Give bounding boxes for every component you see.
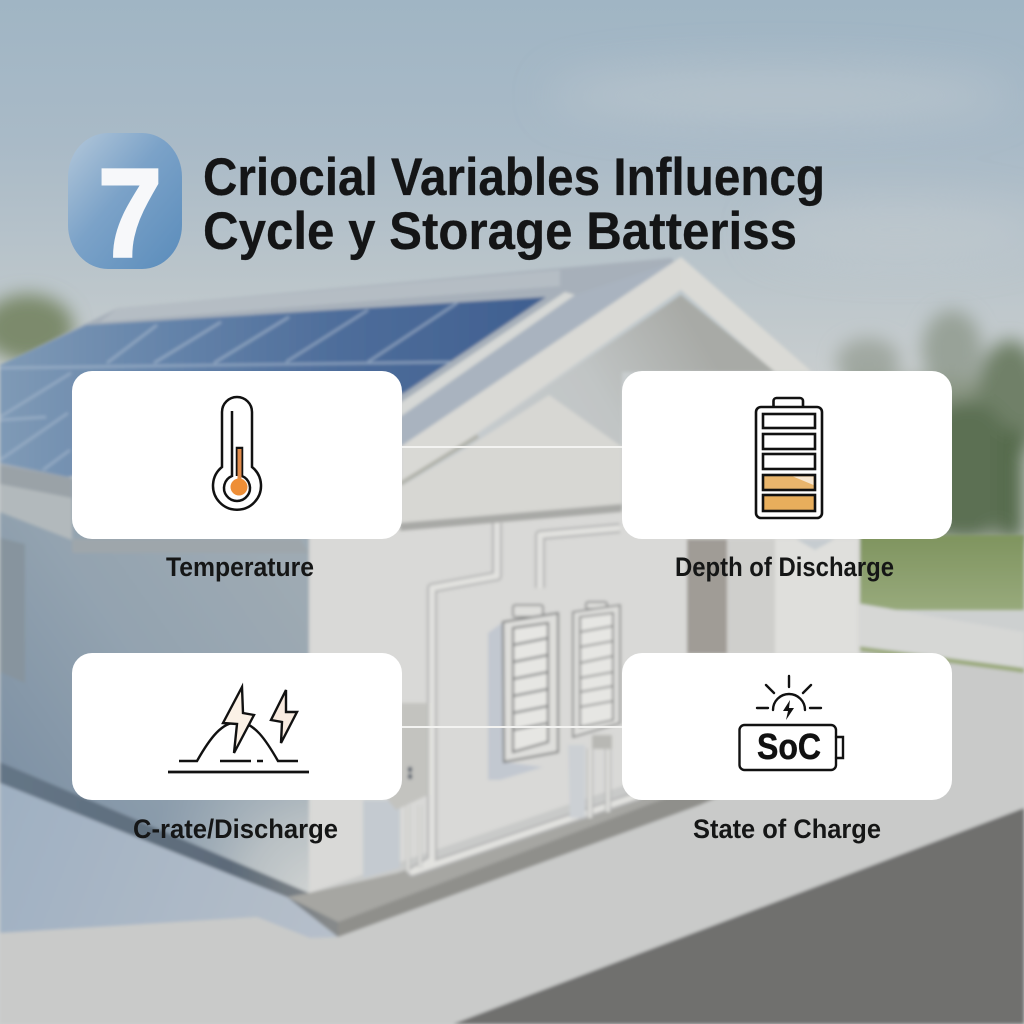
connector line: bottom row	[402, 726, 622, 728]
number badge: 7	[98, 144, 162, 283]
roof	[0, 258, 675, 478]
title: Cycle y Storage Batteriss	[203, 202, 797, 261]
gable	[400, 295, 775, 487]
icon: lightning over curve	[168, 687, 309, 772]
icon: thermometer	[213, 397, 261, 510]
number badge	[68, 133, 182, 283]
title: Criocial Variables Influencg	[203, 148, 825, 207]
label: temperature: Temperature	[166, 552, 314, 582]
ground shadow	[0, 783, 338, 938]
panel: c-rate	[72, 653, 402, 800]
plinth	[287, 708, 860, 922]
front wall	[309, 510, 860, 893]
icon: SoC battery with sun: SoC	[757, 726, 821, 767]
panel: state of charge	[622, 653, 952, 800]
pipes	[408, 523, 640, 872]
icon: SoC battery with sun	[740, 676, 843, 770]
title	[203, 148, 825, 261]
connector line: top row	[402, 446, 622, 448]
shade by meter	[363, 800, 400, 878]
wall batteries	[488, 622, 543, 780]
panel: temperature	[72, 371, 402, 539]
label: c-rate: C-rate/Discharge	[133, 814, 338, 844]
label: depth of discharge: Depth of Discharge	[675, 552, 894, 582]
meter box	[388, 703, 428, 810]
icon: battery levels	[756, 398, 822, 518]
label: state of charge: State of Charge	[693, 814, 881, 844]
side wall in shade	[0, 470, 309, 893]
panel: depth of discharge	[622, 371, 952, 539]
